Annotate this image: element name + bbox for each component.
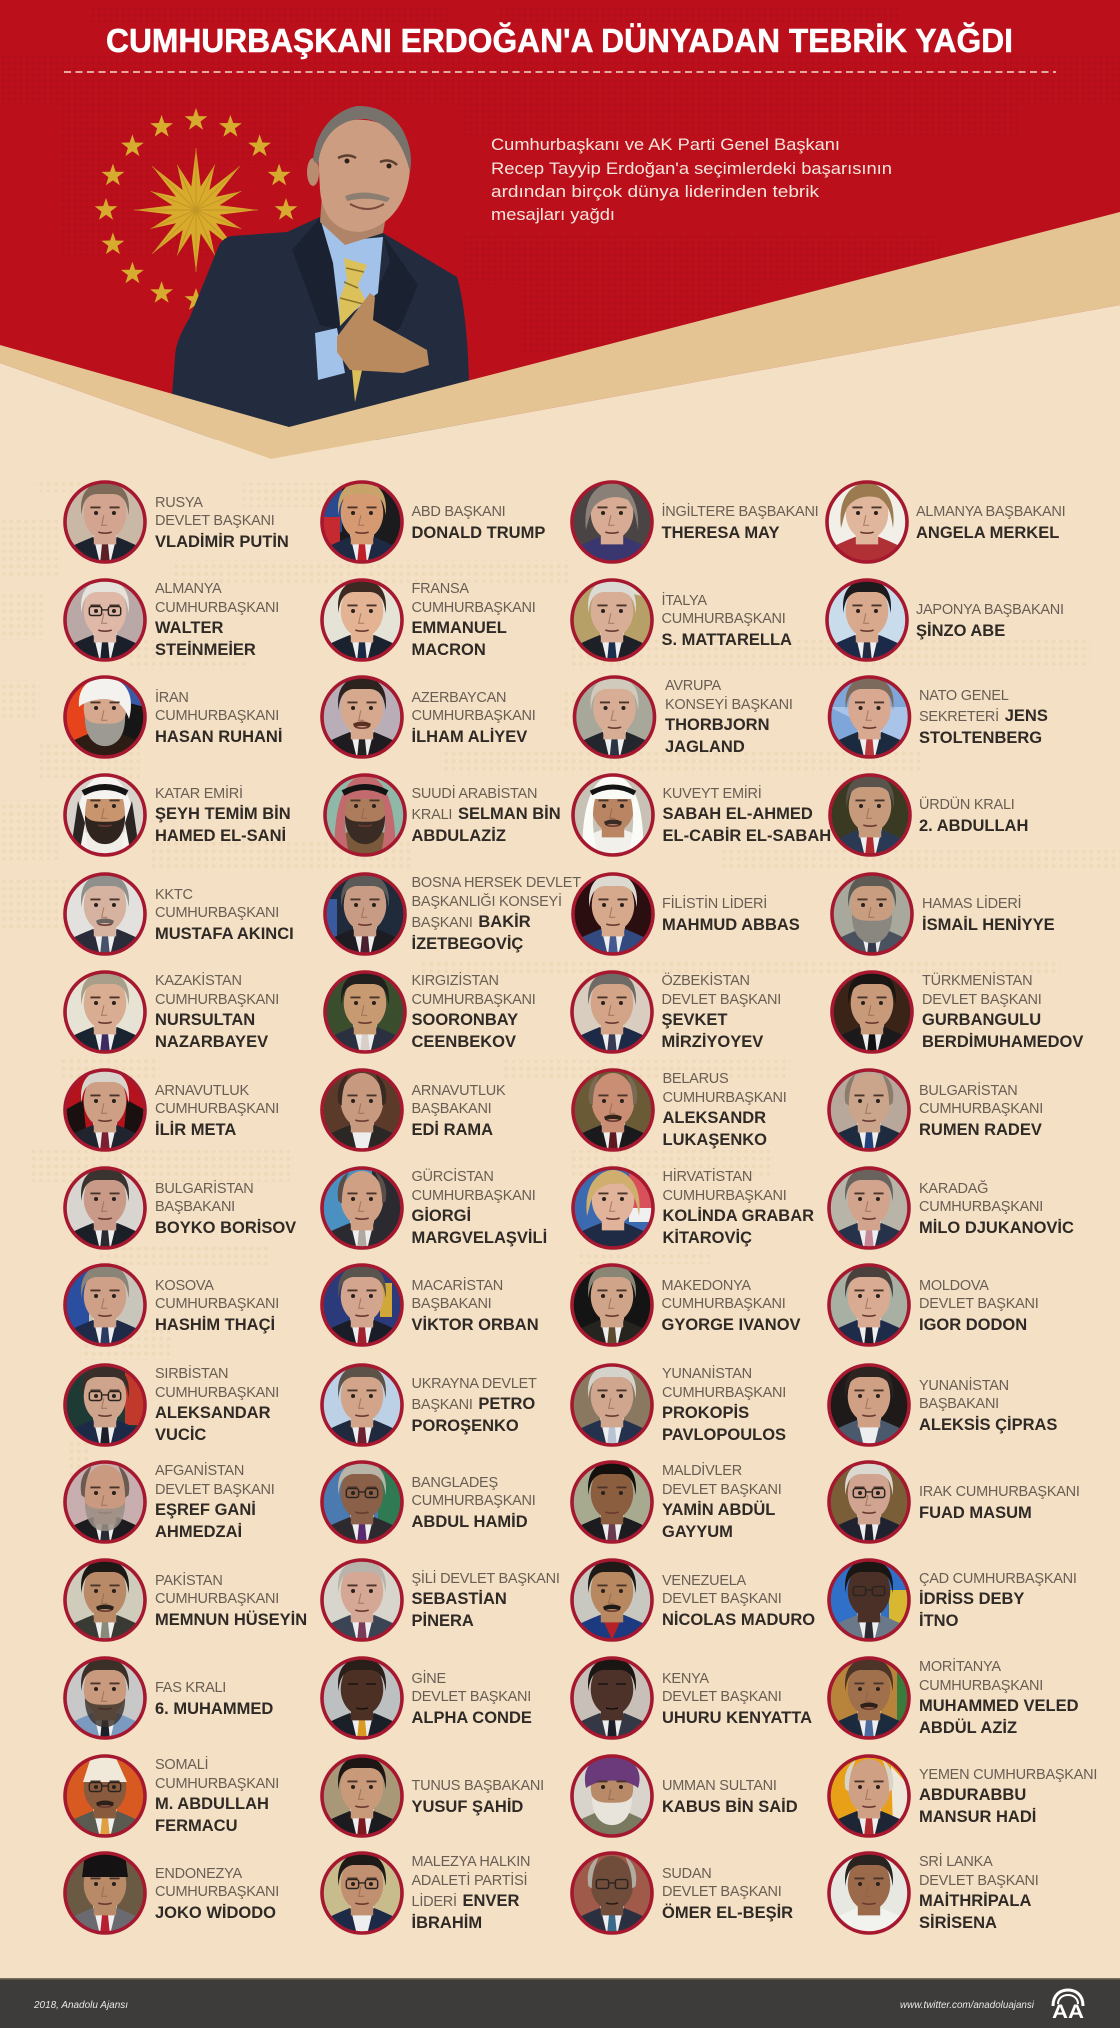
leader: Sergio Mattarella: [568, 579, 792, 664]
caption: Thaçi: KOSOVA: [155, 1278, 214, 1294]
caption: Stoltenberg: NATO GENEL: [919, 688, 1009, 704]
caption: Maduro: VENEZUELA: [662, 1573, 747, 1589]
caption: Rama: EDİ RAMA: [412, 1121, 493, 1139]
caption: Sirisena: DEVLET BAŞKANI: [919, 1873, 1039, 1889]
caption: Nazarbayev: NURSULTAN: [155, 1011, 255, 1029]
caption: Fermacu: CUMHURBAŞKANI: [155, 1776, 279, 1792]
caption: Ivanov: GYORGE IVANOV: [662, 1316, 801, 1334]
caption: Beşir: ÖMER EL-BEŞİR: [662, 1903, 793, 1922]
caption: Steinmeier: STEİNMEİER: [155, 641, 256, 659]
caption: Ruhani: İRAN: [155, 688, 189, 706]
caption: Orban: BAŞBAKANI: [412, 1296, 491, 1312]
leader: Abdulla Yameen: [568, 1461, 782, 1546]
caption: Aliyev: CUMHURBAŞKANI: [412, 708, 536, 724]
footer bar: [0, 1978, 1120, 2028]
caption: Aliyev: İLHAM ALİYEV: [412, 728, 527, 746]
caption: Temim: HAMED EL-SANİ: [155, 827, 286, 845]
caption: Stoltenberg: SEKRETERİ: [919, 707, 1003, 725]
caption: Ruhani: CUMHURBAŞKANI: [155, 708, 279, 724]
caption: Selman: SELMAN BİN: [458, 805, 561, 823]
caption: Trump: ABD BAŞKANI: [412, 504, 505, 520]
caption: Thaçi: CUMHURBAŞKANI: [155, 1296, 279, 1312]
leader: Tamim bin Hamad: [61, 774, 291, 859]
caption: Borisov: BOYKO BORİSOV: [155, 1219, 296, 1237]
leader: Emmanuel Macron: [318, 579, 536, 664]
leader: Petro Poroshenko: [318, 1364, 537, 1449]
caption: Jagland: AVRUPA: [665, 678, 722, 694]
caption: Deby: İDRİSS DEBY: [919, 1590, 1024, 1608]
leader: Mahmud Abbas: [569, 873, 800, 958]
caption: Abbas: MAHMUD ABBAS: [662, 916, 800, 934]
leader: Rumen Radev: [825, 1069, 1043, 1154]
leader: Ashraf Ghani: [61, 1461, 275, 1546]
caption: Widodo: ENDONEZYA: [155, 1866, 242, 1882]
caption: Conde: GİNE: [412, 1669, 447, 1687]
leader: Nicolás Maduro: [568, 1559, 815, 1644]
leader: Walter Steinmeier: [61, 579, 279, 664]
caption: Pavlopoulos: PAVLOPOULOS: [662, 1426, 786, 1444]
caption: Heniyye: İSMAİL HENİYYE: [922, 916, 1055, 934]
caption: Sirisena: SİRİSENA: [919, 1914, 997, 1932]
caption: Conde: DEVLET BAŞKANI: [412, 1689, 531, 1705]
intro text: Cumhurbaşkanı ve AK Parti Genel Başkanı: [491, 135, 840, 154]
leader: Uhuru Kenyatta: [568, 1657, 812, 1742]
leader: Mustafa Akıncı: [61, 873, 294, 958]
caption: Enver İbrahim: ENVER: [463, 1892, 519, 1910]
caption: Mattarella: İTALYA: [662, 591, 707, 609]
caption: Poroşenko: POROŞENKO: [412, 1417, 519, 1435]
caption: Lukaşenko: BELARUS: [662, 1071, 728, 1087]
caption: Vucic: VUCİC: [155, 1426, 206, 1444]
leader: Giorgi Margvelashvili: [318, 1167, 547, 1252]
caption: İzetbegović: BAŞKANI: [412, 915, 476, 931]
caption: Abe: JAPONYA BAŞBAKANI: [916, 602, 1064, 618]
caption: Poroşenko: UKRAYNA DEVLET: [412, 1376, 537, 1392]
leader: Mohamed Abdullahi Farmajo: [61, 1755, 279, 1840]
caption: Dodon: MOLDOVA: [919, 1278, 989, 1294]
caption: Lukaşenko: CUMHURBAŞKANI: [662, 1090, 787, 1106]
caption: Aliyev: AZERBAYCAN: [412, 690, 506, 706]
caption: Beşir: SUDAN: [662, 1866, 712, 1882]
caption: Abe: ŞİNZO ABE: [916, 622, 1005, 640]
caption: Hadi: MANSUR HADİ: [919, 1808, 1036, 1826]
caption: Maduro: DEVLET BAŞKANI: [662, 1591, 782, 1607]
caption: Orban: VİKTOR ORBAN: [412, 1316, 539, 1334]
caption: Ceenbekov: CUMHURBAŞKANI: [412, 992, 536, 1008]
caption: Djukanoviç: KARADAĞ: [919, 1180, 988, 1197]
caption: Nazarbayev: NAZARBAYEV: [155, 1033, 268, 1051]
presidential emblem: [95, 108, 297, 310]
caption: Yamin: MALDİVLER: [662, 1461, 742, 1479]
caption: Borisov: BULGARİSTAN: [155, 1179, 254, 1197]
caption: Enver İbrahim: MALEZYA HALKIN: [412, 1854, 530, 1870]
caption: Putin: VLADİMİR PUTİN: [155, 533, 289, 551]
caption: Meta: CUMHURBAŞKANI: [155, 1101, 279, 1117]
caption: Macron: EMMANUEL: [412, 619, 507, 637]
leader: Shinzo Abe: [823, 579, 1064, 664]
leader: Jens Stoltenberg: [826, 676, 1048, 761]
caption: Gani: EŞREF GANİ: [155, 1501, 256, 1519]
leader: Omar al-Bashir: [568, 1852, 793, 1937]
caption: Kenyatta: KENYA: [662, 1671, 709, 1687]
leader: Mohamed Ould Abdel Aziz: [825, 1657, 1079, 1742]
caption: Maduro: NİCOLAS MADURO: [662, 1611, 815, 1629]
caption: Lukaşenko: LUKAŞENKO: [662, 1131, 767, 1149]
caption: Ceenbekov: CEENBEKOV: [412, 1033, 516, 1051]
caption: Sabah: KUVEYT EMİRİ: [662, 784, 762, 802]
caption: Dodon: DEVLET BAŞKANI: [919, 1296, 1039, 1312]
leader: Prokopis Pavlopoulos: [568, 1364, 786, 1449]
leader: Sabah Al-Ahmad: [569, 774, 831, 859]
caption: Deby: İTNO: [919, 1612, 959, 1630]
caption: Veled Abdül Aziz: MORİTANYA: [919, 1657, 1001, 1675]
caption: Memnun: CUMHURBAŞKANI: [155, 1591, 279, 1607]
leader: Igor Dodon: [825, 1264, 1039, 1349]
caption: Meta: İLİR META: [155, 1121, 236, 1139]
leader: Mamnoon Hussain: [61, 1559, 307, 1644]
caption: Selman: KRALI: [412, 807, 456, 823]
leader: Bakir İzetbegović: [321, 873, 581, 958]
leader: Hassan Rouhani: [61, 676, 282, 761]
caption: May: THERESA MAY: [662, 524, 779, 542]
caption: Enver İbrahim: İBRAHİM: [412, 1914, 482, 1932]
leader: Ilham Aliyev: [318, 676, 536, 761]
leader: Donald Trump: [318, 481, 545, 566]
caption: Sirisena: MAİTHRİPALA: [919, 1892, 1032, 1910]
caption: Orban: MACARİSTAN: [412, 1276, 503, 1294]
caption: Pinera: ŞİLİ DEVLET BAŞKANI: [412, 1569, 560, 1587]
caption: Macron: FRANSA: [412, 581, 469, 597]
footer url: www.twitter.com/anadoluajansi: [900, 1999, 1035, 2011]
caption: Berdimuhamedov: GURBANGULU: [922, 1011, 1041, 1029]
caption: İzetbegović: BOSNA HERSEK DEVLET: [412, 875, 581, 891]
caption: Pavlopoulos: YUNANİSTAN: [662, 1364, 752, 1382]
leader: Shavkat Mirziyoyev: [568, 971, 781, 1056]
caption: Ivanov: MAKEDONYA: [662, 1278, 751, 1294]
caption: Masum: FUAD MASUM: [919, 1504, 1032, 1522]
caption: Yamin: DEVLET BAŞKANI: [662, 1482, 782, 1498]
leader: Vladimir Putin: [61, 481, 289, 566]
caption: Hamid: BANGLADEŞ: [412, 1475, 498, 1491]
caption: Hadi: ABDURABBU: [919, 1786, 1026, 1804]
caption: Hamid: CUMHURBAŞKANI: [412, 1493, 536, 1509]
caption: Merkel: ANGELA MERKEL: [916, 524, 1059, 542]
leader: Abdullah II: [826, 774, 1028, 859]
caption: Çipras: ALEKSİS ÇİPRAS: [919, 1416, 1057, 1434]
caption: Borisov: BAŞBAKANI: [155, 1199, 235, 1215]
leader: Ilir Meta: [61, 1069, 279, 1154]
caption: Muhammed: 6. MUHAMMED: [155, 1700, 273, 1718]
caption: Memnun: PAKİSTAN: [155, 1571, 223, 1589]
caption: Veled Abdül Aziz: ABDÜL AZİZ: [919, 1718, 1017, 1737]
caption: Jagland: KONSEYİ BAŞKANI: [665, 695, 793, 713]
icon: AA logo: AA: [1052, 2002, 1084, 2023]
caption: Gani: AFGANİSTAN: [155, 1461, 244, 1479]
caption: Yamin: YAMİN ABDÜL: [662, 1500, 775, 1519]
caption: Mirziyoyev: MİRZİYOYEV: [662, 1033, 763, 1051]
caption: Djukanoviç: MİLO DJUKANOVİC: [919, 1219, 1074, 1237]
leader: Thorbjorn Jagland: [570, 676, 793, 761]
intro text: mesajları yağdı: [491, 205, 615, 224]
leader: Ismail Haniyeh: [828, 873, 1055, 958]
caption: Temim: ŞEYH TEMİM BİN: [155, 805, 291, 823]
leader: Aleksandar Vučić: [61, 1364, 279, 1449]
caption: Conde: ALPHA CONDE: [412, 1709, 532, 1727]
caption: Berdimuhamedov: BERDİMUHAMEDOV: [922, 1033, 1083, 1051]
leader: Nursultan Nazarbayev: [61, 971, 279, 1056]
leader: Boyko Borisov: [61, 1167, 296, 1252]
caption: Deby: ÇAD CUMHURBAŞKANI: [919, 1571, 1077, 1587]
caption: Dodon: IGOR DODON: [919, 1316, 1027, 1334]
caption: Poroşenko: PETRO: [478, 1395, 535, 1413]
caption: Kenyatta: UHURU KENYATTA: [662, 1709, 812, 1727]
leader: Idriss Déby: [825, 1559, 1077, 1644]
caption: Ruhani: HASAN RUHANİ: [155, 728, 282, 746]
intro text: ardından birçok dünya liderinden tebrik: [491, 182, 820, 201]
caption: Widodo: JOKO WİDODO: [155, 1904, 276, 1922]
caption: Berdimuhamedov: TÜRKMENİSTAN: [922, 971, 1032, 989]
caption: Steinmeier: ALMANYA: [155, 581, 222, 597]
caption: Selman: ABDULAZİZ: [412, 827, 506, 845]
title: CUMHURBAŞKANI ERDOĞAN'A DÜNYADAN TEBRİK YAĞDI: [106, 22, 1013, 59]
leader: Anwar Ibrahim: [318, 1852, 530, 1937]
leader: Abdul Hamid: [318, 1461, 536, 1546]
leader: Qaboos bin Said: [568, 1755, 798, 1840]
caption: Heniyye: HAMAS LİDERİ: [922, 894, 1021, 912]
caption: Hadi: YEMEN CUMHURBAŞKANI: [919, 1767, 1097, 1783]
caption: Thaçi: HASHİM THAÇİ: [155, 1316, 275, 1334]
caption: Jagland: THORBJORN: [665, 716, 770, 734]
caption: Şahid: TUNUS BAŞBAKANI: [412, 1778, 544, 1794]
leader: Edi Rama: [318, 1069, 506, 1154]
leader: Angela Merkel: [823, 481, 1065, 566]
caption: Radev: CUMHURBAŞKANI: [919, 1101, 1043, 1117]
caption: Margvelaşvili: GİORGİ: [412, 1207, 471, 1225]
leader: Sebastián Piñera: [318, 1559, 560, 1644]
caption: Ivanov: CUMHURBAŞKANI: [662, 1296, 786, 1312]
leader: Abdrabbuh Mansur Hadi: [825, 1755, 1097, 1840]
footer credit: 2018, Anadolu Ajansı: [33, 1999, 128, 2011]
caption: Djukanoviç: CUMHURBAŞKANI: [919, 1199, 1043, 1215]
caption: Steinmeier: WALTER: [155, 619, 224, 637]
leader: Fuad Masum: [825, 1461, 1080, 1546]
caption: Abbas: FİLİSTİN LİDERİ: [662, 894, 767, 912]
caption: Enver İbrahim: LİDERİ: [412, 1892, 461, 1910]
caption: Grabar Kitaroviç: CUMHURBAŞKANI: [662, 1188, 787, 1204]
caption: Fermacu: FERMACU: [155, 1817, 238, 1835]
caption: Grabar Kitaroviç: KİTAROVİÇ: [662, 1229, 752, 1247]
caption: Pavlopoulos: CUMHURBAŞKANI: [662, 1385, 786, 1401]
caption: Beşir: DEVLET BAŞKANI: [662, 1884, 782, 1900]
caption: Steinmeier: CUMHURBAŞKANI: [155, 600, 279, 616]
caption: Selman: SUUDİ ARABİSTAN: [412, 784, 537, 802]
body dotted world map: [0, 482, 1120, 1480]
header dotted world map: [0, 6, 1120, 355]
leader: Hashim Thaçi: [61, 1264, 279, 1349]
caption: Veled Abdül Aziz: MUHAMMED VELED: [919, 1697, 1079, 1715]
leader: Alexis Tsipras: [825, 1364, 1057, 1449]
caption: Mattarella: CUMHURBAŞKANI: [662, 611, 786, 627]
caption: Abdullah: ÜRDÜN KRALI: [919, 795, 1015, 813]
leader: Kolinda Grabar-Kitarović: [569, 1167, 814, 1252]
caption: Lukaşenko: ALEKSANDR: [662, 1109, 766, 1127]
caption: Macron: CUMHURBAŞKANI: [412, 600, 536, 616]
caption: Fermacu: SOMALİ: [155, 1755, 208, 1773]
leader: Theresa May: [568, 481, 818, 566]
caption: Nazarbayev: CUMHURBAŞKANI: [155, 992, 279, 1008]
caption: Akıncı: KKTC: [155, 887, 193, 903]
caption: Yamin: GAYYUM: [662, 1523, 733, 1541]
icon: AA logo: [1052, 1990, 1084, 2023]
caption: Margvelaşvili: MARGVELAŞVİLİ: [412, 1229, 547, 1247]
caption: Sabah: SABAH EL-AHMED: [662, 805, 813, 823]
caption: Mirziyoyev: DEVLET BAŞKANI: [662, 992, 781, 1008]
caption: Meta: ARNAVUTLUK: [155, 1083, 249, 1099]
leader: Alpha Condé: [318, 1657, 532, 1742]
leader: Sooronbay Ceenbekov: [321, 971, 536, 1056]
caption: İzetbegović: İZETBEGOVİÇ: [412, 935, 523, 953]
caption: Akıncı: CUMHURBAŞKANI: [155, 905, 279, 921]
leader: Gjorge Ivanov: [568, 1264, 801, 1349]
caption: Margvelaşvili: GÜRCİSTAN: [412, 1167, 494, 1185]
caption: Nazarbayev: KAZAKİSTAN: [155, 971, 242, 989]
caption: İzetbegović: BAKİR: [478, 913, 531, 931]
portrait: Recep Tayyip Erdoğan: [160, 106, 469, 440]
leader: Salman bin Abdulaziz: [321, 774, 561, 859]
caption: Gani: DEVLET BAŞKANI: [155, 1482, 275, 1498]
red header panel: [0, 0, 1120, 440]
caption: Veled Abdül Aziz: CUMHURBAŞKANI: [919, 1678, 1043, 1694]
caption: Temim: KATAR EMİRİ: [155, 784, 243, 802]
caption: Pinera: SEBASTİAN: [412, 1590, 507, 1608]
caption: Rama: BAŞBAKANI: [412, 1101, 491, 1117]
leader: Viktor Orbán: [318, 1264, 539, 1349]
caption: Sirisena: SRİ LANKA: [919, 1852, 993, 1870]
leader: Milo Đukanović: [825, 1167, 1074, 1252]
caption: Fermacu: M. ABDULLAH: [155, 1795, 269, 1813]
caption: Masum: IRAK CUMHURBAŞKANI: [919, 1484, 1080, 1500]
caption: Kabus: KABUS BİN SAİD: [662, 1798, 798, 1816]
caption: Kenyatta: DEVLET BAŞKANI: [662, 1689, 782, 1705]
leader: Youssef Chahed: [318, 1755, 544, 1840]
caption: Ceenbekov: KIRGIZİSTAN: [412, 971, 499, 989]
caption: Gani: AHMEDZAİ: [155, 1523, 242, 1541]
leader: Maithripala Sirisena: [825, 1852, 1039, 1937]
caption: Vucic: ALEKSANDAR: [155, 1404, 271, 1422]
caption: Grabar Kitaroviç: HİRVATİSTAN: [662, 1167, 752, 1185]
caption: Sabah: EL-CABİR EL-SABAH: [662, 827, 831, 845]
caption: Grabar Kitaroviç: KOLİNDA GRABAR: [662, 1207, 814, 1225]
caption: Vucic: CUMHURBAŞKANI: [155, 1385, 279, 1401]
caption: Ceenbekov: SOORONBAY: [412, 1011, 518, 1029]
tan ribbon band: [0, 212, 1120, 459]
caption: May: İNGİLTERE BAŞBAKANI: [662, 502, 818, 520]
caption: Çipras: YUNANİSTAN: [919, 1376, 1009, 1394]
caption: Margvelaşvili: CUMHURBAŞKANI: [412, 1188, 536, 1204]
caption: Abdullah: 2. ABDULLAH: [919, 817, 1028, 835]
caption: Pavlopoulos: PROKOPİS: [662, 1404, 749, 1422]
caption: Enver İbrahim: ADALETİ PARTİSİ: [412, 1871, 527, 1889]
leader: Mohammed VI: [61, 1657, 273, 1742]
caption: Memnun: MEMNUN HÜSEYİN: [155, 1610, 307, 1629]
caption: Hamid: ABDUL HAMİD: [412, 1513, 528, 1531]
caption: Trump: DONALD TRUMP: [412, 524, 545, 542]
leader: Joko Widodo: [61, 1852, 279, 1937]
caption: Putin: RUSYA: [155, 495, 203, 511]
caption: Macron: MACRON: [412, 641, 486, 659]
caption: Vucic: SIRBİSTAN: [155, 1364, 228, 1382]
caption: Jagland: JAGLAND: [665, 738, 745, 756]
caption: Berdimuhamedov: DEVLET BAŞKANI: [922, 992, 1042, 1008]
caption: Mirziyoyev: ÖZBEKİSTAN: [662, 971, 750, 989]
caption: Radev: RUMEN RADEV: [919, 1121, 1042, 1139]
caption: Pinera: PİNERA: [412, 1612, 474, 1630]
caption: Mirziyoyev: ŞEVKET: [662, 1011, 728, 1029]
caption: Stoltenberg: STOLTENBERG: [919, 729, 1042, 747]
caption: Rama: ARNAVUTLUK: [412, 1083, 506, 1099]
caption: Radev: BULGARİSTAN: [919, 1081, 1018, 1099]
caption: Muhammed: FAS KRALI: [155, 1680, 226, 1696]
caption: Akıncı: MUSTAFA AKINCI: [155, 925, 294, 943]
caption: Widodo: CUMHURBAŞKANI: [155, 1884, 279, 1900]
caption: Stoltenberg: JENS: [1005, 707, 1048, 725]
leader: Alexander Lukashenko: [569, 1069, 787, 1154]
caption: Kabus: UMMAN SULTANI: [662, 1778, 777, 1794]
caption: Mattarella: S. MATTARELLA: [662, 631, 792, 649]
caption: Poroşenko: BAŞKANI: [412, 1397, 476, 1413]
caption: Şahid: YUSUF ŞAHİD: [412, 1798, 523, 1816]
leader: Gurbanguly Berdimuhamedow: [828, 971, 1083, 1056]
caption: Putin: DEVLET BAŞKANI: [155, 513, 275, 529]
caption: İzetbegović: BAŞKANLIĞI KONSEYİ: [412, 892, 562, 910]
intro text: Recep Tayyip Erdoğan'a seçimlerdeki başarısının: [491, 159, 892, 178]
caption: Çipras: BAŞBAKANI: [919, 1396, 999, 1412]
caption: Merkel: ALMANYA BAŞBAKANI: [916, 504, 1065, 520]
